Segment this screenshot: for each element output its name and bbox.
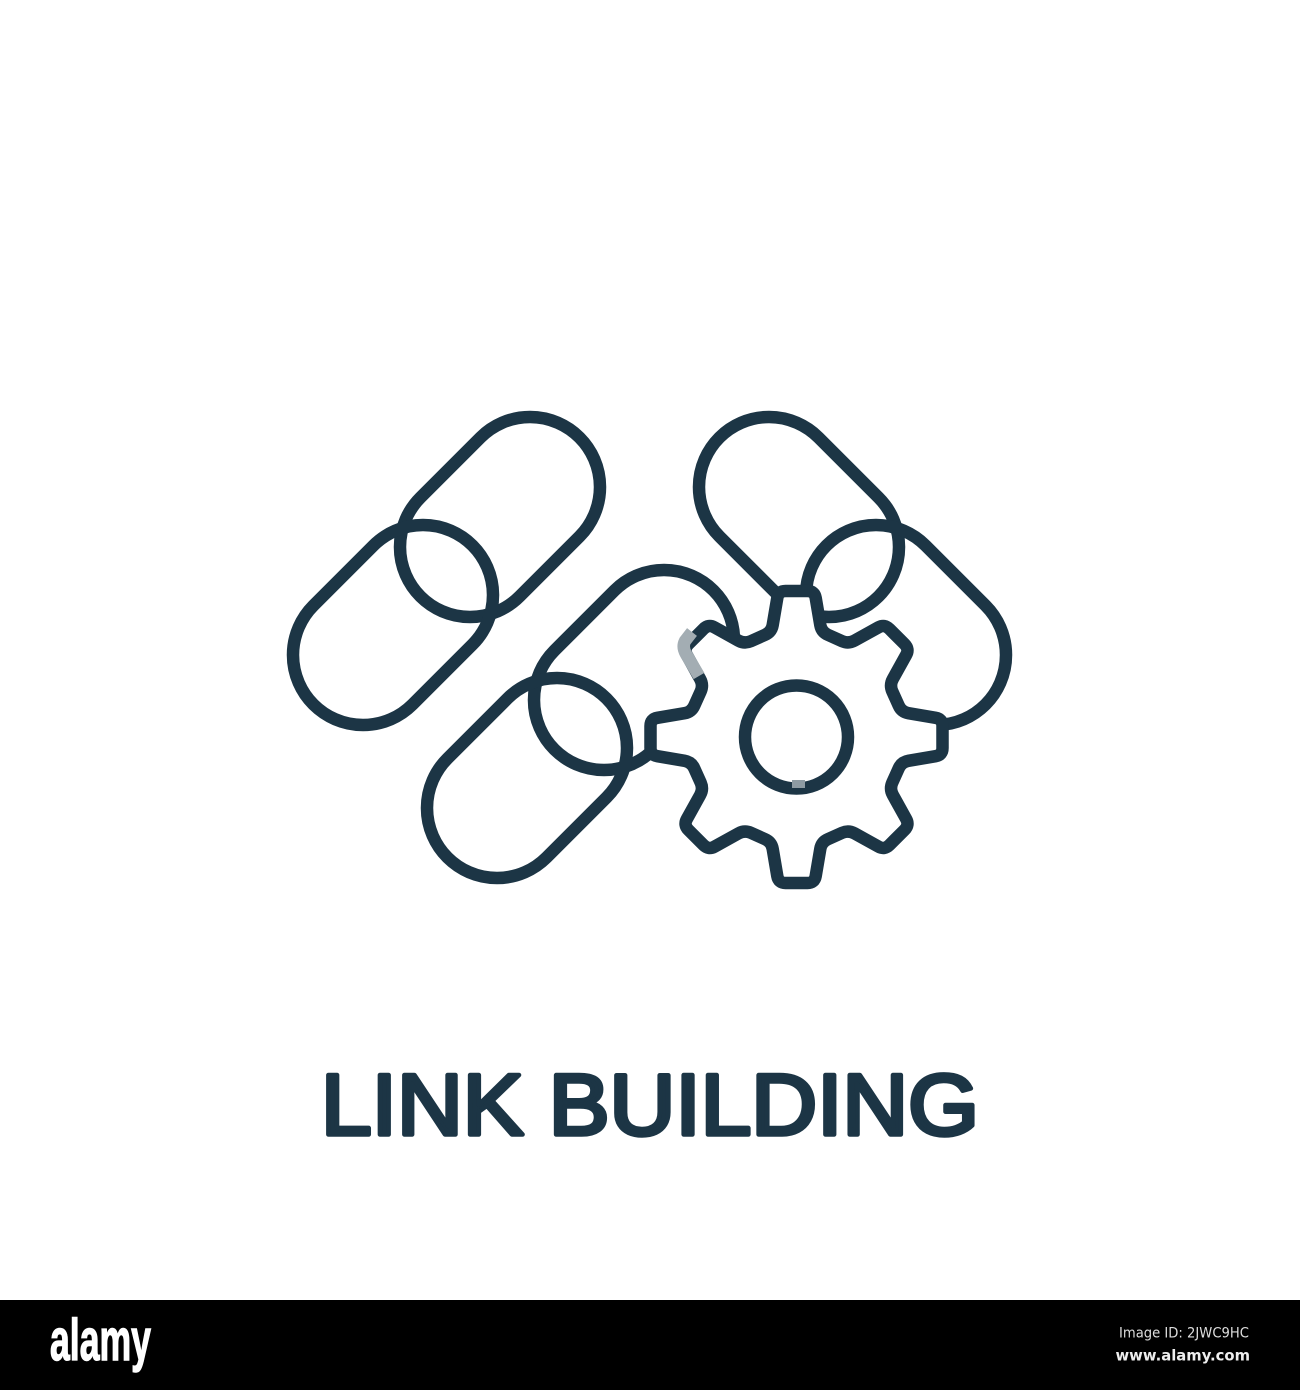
watermark ghost mark on gear hole [792, 780, 805, 788]
footer bar [0, 1300, 1300, 1390]
icon: upper-right chain link pair [699, 417, 1006, 725]
icon: lower-middle chain link pair [427, 570, 734, 878]
icon: gear [650, 591, 942, 883]
title: LINK BUILDING [321, 1058, 979, 1154]
website: www.alamy.com [1116, 1346, 1250, 1364]
icon: upper-left chain link pair [293, 417, 600, 725]
watermark ghost mark on gear edge [684, 632, 699, 676]
image id: Image ID: 2JWC9HC [1119, 1326, 1249, 1342]
footer logo: alamy [50, 1308, 151, 1373]
icon: link building [293, 417, 1006, 883]
